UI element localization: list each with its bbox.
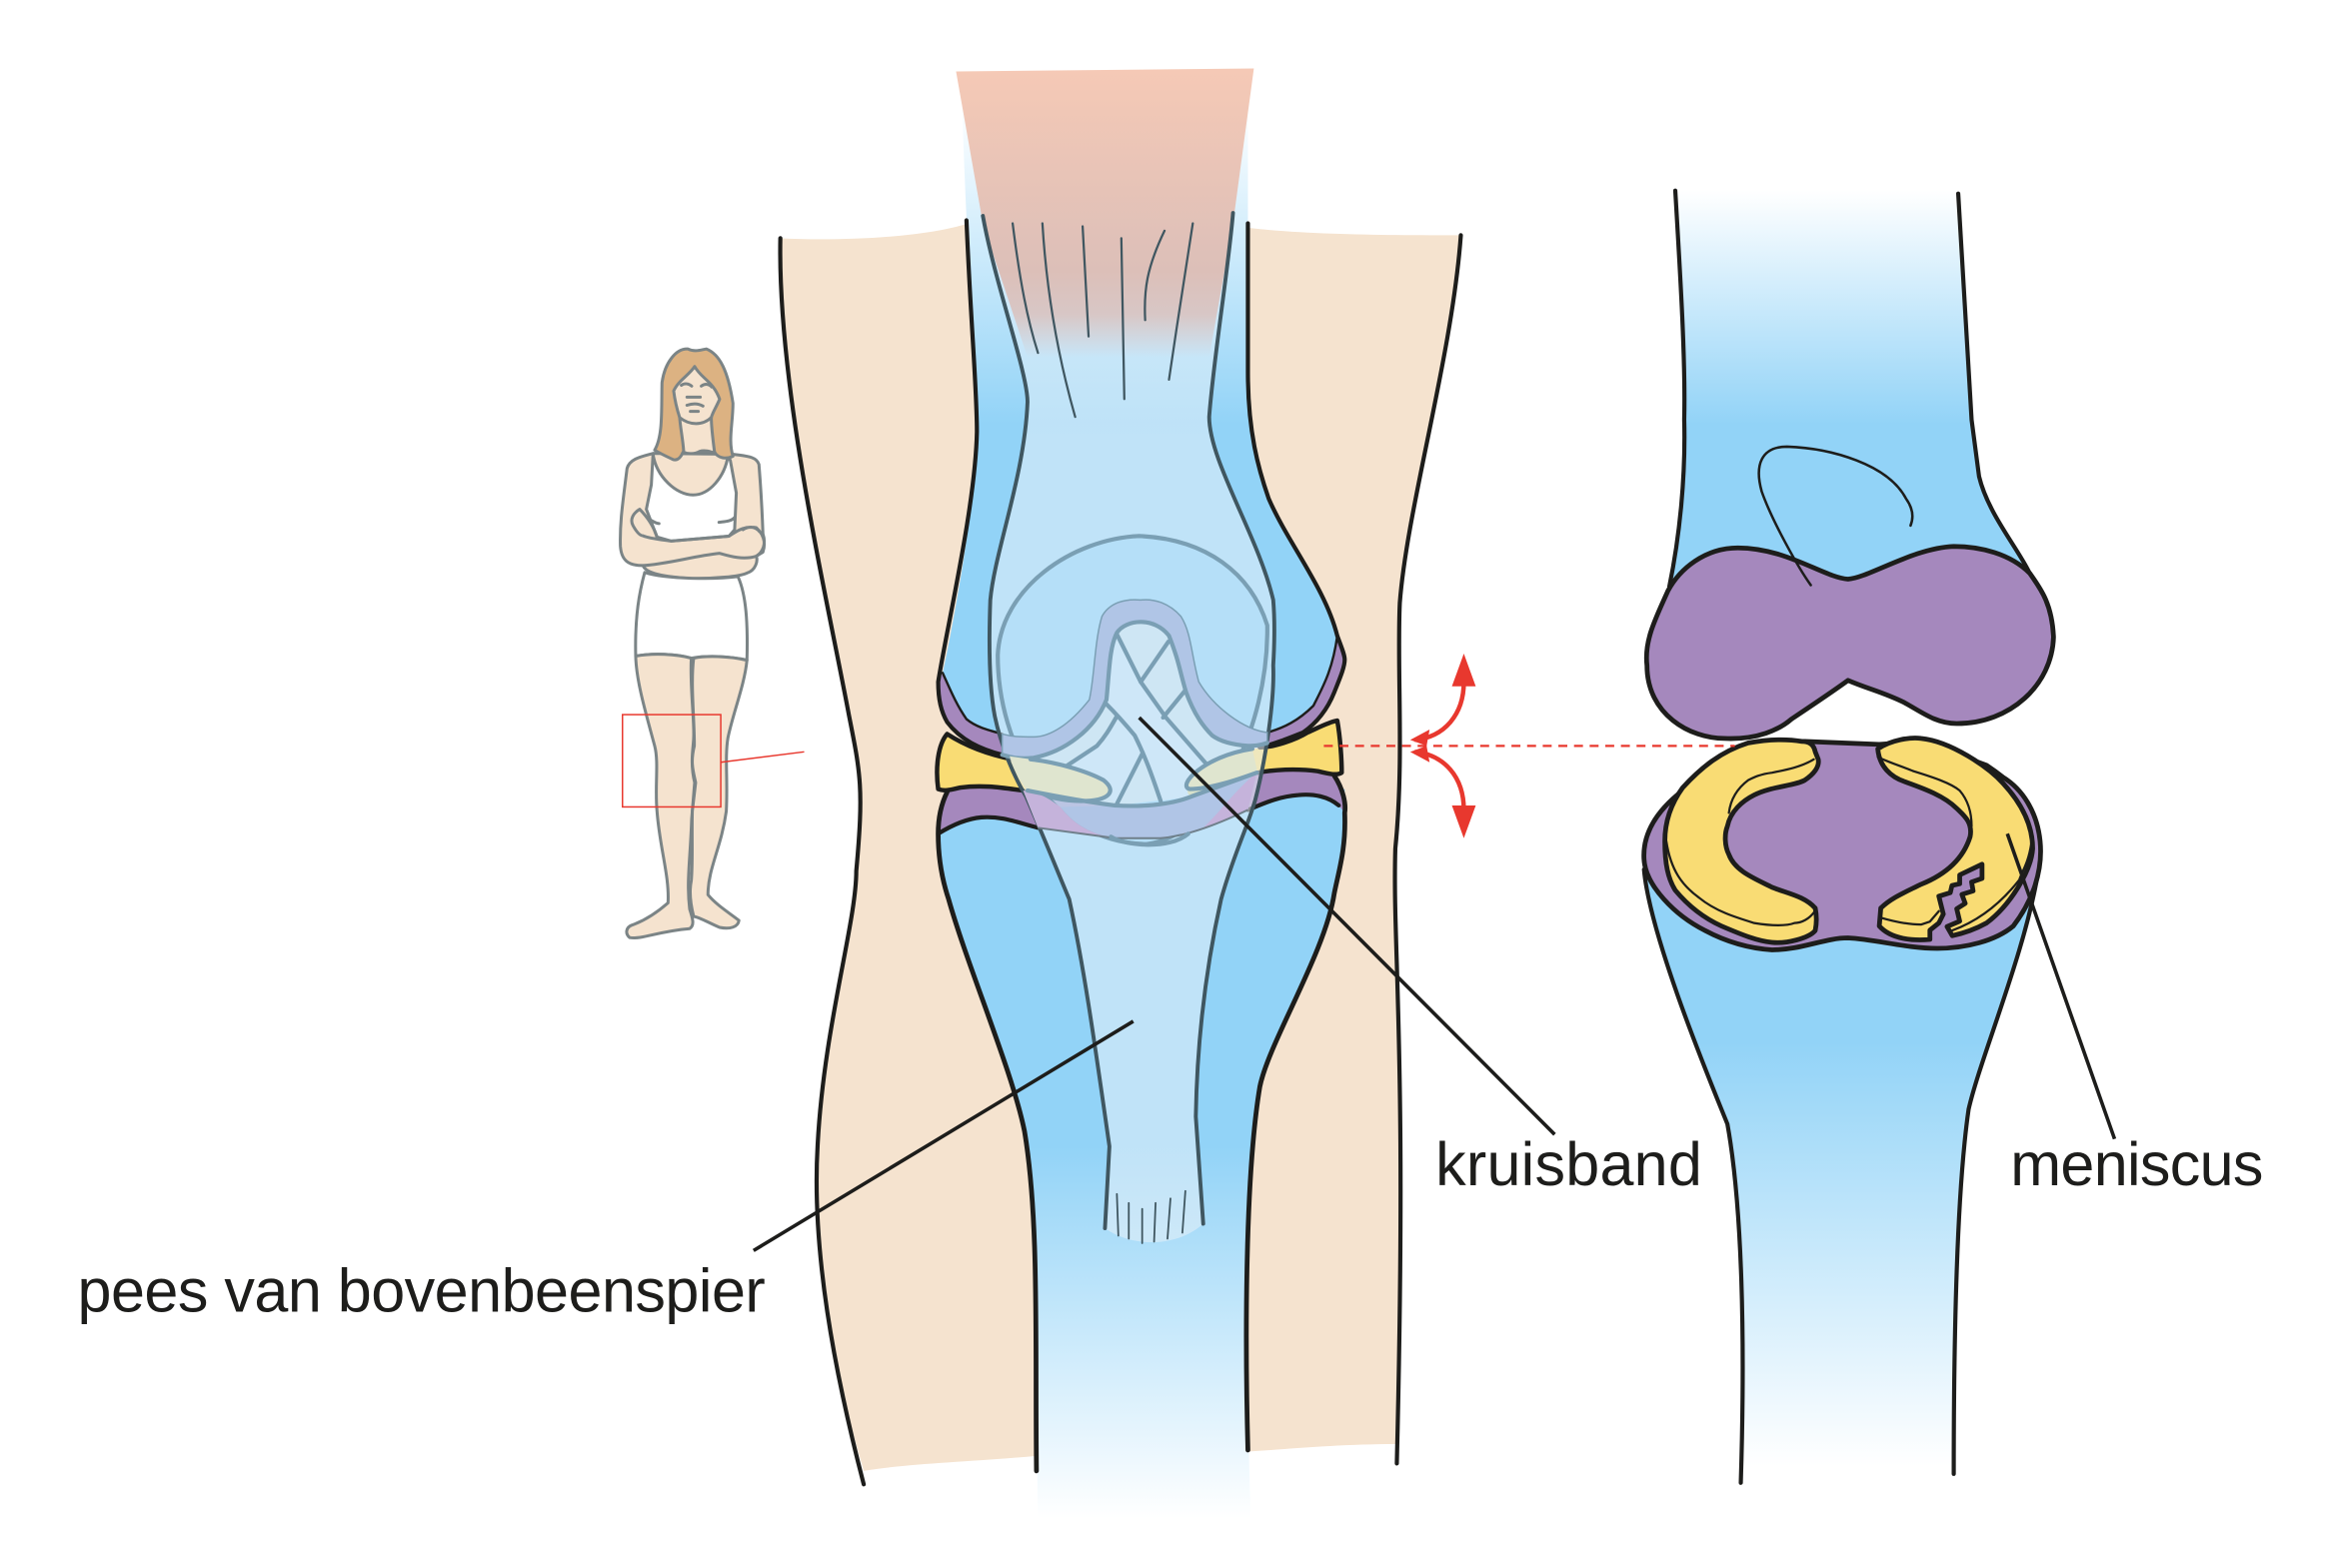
white top [647,454,737,541]
torn lateral meniscus [1878,739,2033,939]
leader line: tendon [754,1021,1134,1250]
label: tendon: pees van bovenbeenspier [78,1256,766,1324]
femur outlines [1669,191,1684,587]
leader line: cruciate ligament [1140,718,1554,1134]
label: cruciate ligament: kruisband [1435,1130,1702,1198]
joint space fill [1023,622,1258,805]
meniscus in front view [937,721,1341,799]
outer contour of the leg, left [781,238,864,1484]
femur outline right [1958,194,2030,574]
fibres at tendon top [1013,223,1192,417]
femoral condyles [1646,547,2053,739]
tibia shaft [1644,869,2039,1466]
red arrows [1410,654,1475,838]
inner meniscus shapes [1010,749,1257,800]
right leg [691,657,747,928]
hair [655,349,733,460]
shorts [636,573,748,661]
panel: front view of knee [781,69,1460,1522]
forearm fold [632,510,765,566]
cartilage band over tibia [1023,773,1256,844]
face [674,367,720,424]
cruciate ligaments [1067,635,1206,803]
woman figure [621,349,765,938]
facial features [680,384,715,454]
skin of the leg [781,223,1460,1471]
tibia bone [939,770,1345,1522]
body skin [621,454,765,579]
left leg [627,655,695,938]
femur bone [939,104,1344,758]
leader line: meniscus [2007,833,2114,1139]
red marker line [721,752,805,763]
tibia outline left [1644,869,1742,1483]
label: meniscus: meniscus [2010,1130,2263,1198]
red marker box [623,715,721,806]
patella contour [1759,447,1912,585]
neck [680,416,715,454]
dashed red section line [1323,745,1735,747]
femur bone, side panel [1669,191,2030,626]
cartilage band over femur [1003,600,1267,759]
fibres at tendon bottom [1117,1191,1185,1243]
panel: axial view of knee [1644,191,2053,1483]
medial meniscus [1665,740,1818,942]
tibia outline right [1954,869,2039,1474]
outer contour of the leg, right [1395,235,1460,1463]
patella outline [998,536,1267,844]
tendon of thigh muscle [956,69,1274,1243]
tibial plateau [1644,742,2040,949]
